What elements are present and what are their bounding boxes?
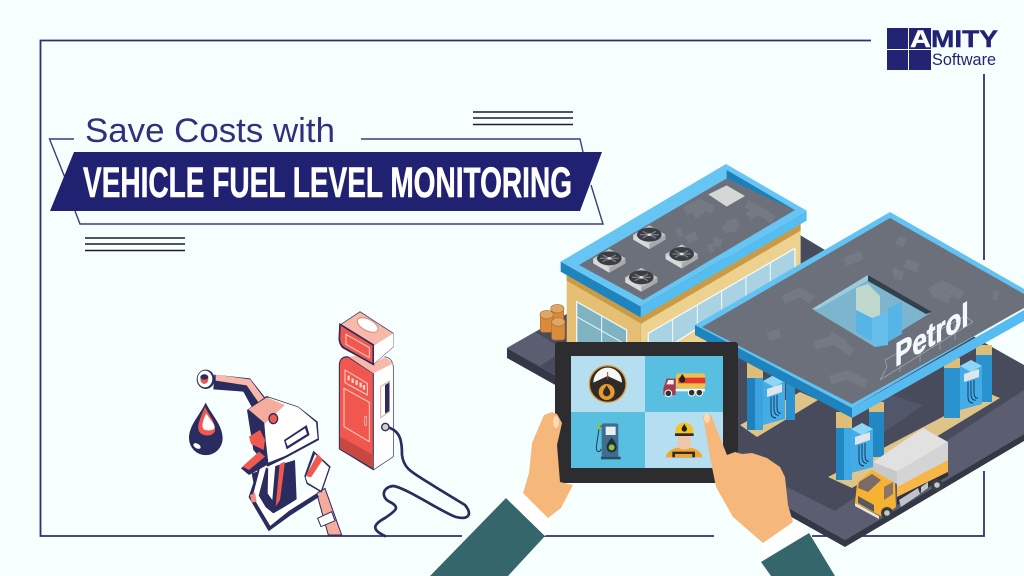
pillar bases <box>740 392 818 437</box>
dispenser body <box>339 356 393 470</box>
fuel dispenser <box>339 312 393 470</box>
left windows <box>577 302 627 373</box>
coins stack <box>540 304 565 340</box>
nozzle guard <box>304 451 331 493</box>
roof inset <box>579 178 795 300</box>
right hand and sleeve <box>703 413 835 576</box>
fuel canopy <box>695 212 1024 488</box>
icon: fuel gauge <box>589 366 626 402</box>
nozzle hose <box>317 488 342 535</box>
dispenser head <box>339 312 393 364</box>
tablet <box>555 342 738 483</box>
triple lines top <box>473 112 573 124</box>
right windows <box>648 248 795 360</box>
roof rim <box>561 262 641 317</box>
frame border <box>40 40 984 536</box>
nozzle spout <box>213 375 268 412</box>
banner ribbon <box>50 152 602 211</box>
nozzle lever <box>241 452 267 475</box>
nozzle body <box>247 396 319 467</box>
heading: vehicle fuel level monitoring: VEHICLE FUEL LEVEL MONITORING <box>83 159 572 207</box>
left sleeve <box>430 498 545 576</box>
right wall <box>641 223 801 373</box>
left hand and sleeve <box>430 412 573 576</box>
right sleeve <box>761 533 835 576</box>
tablet screen <box>571 356 645 412</box>
logo: Amity Software: A <box>910 26 931 53</box>
right cuff <box>761 522 809 560</box>
logo: Amity Software <box>887 26 998 70</box>
heading: save costs with: Save Costs with <box>85 112 335 150</box>
left cuff <box>506 493 552 536</box>
right hand <box>703 413 793 543</box>
roof patches <box>677 203 773 249</box>
fuel nozzle <box>197 370 342 535</box>
left hand <box>523 412 573 518</box>
title block <box>50 112 603 224</box>
logo: Amity Software: MITY <box>931 26 998 53</box>
triple lines bottom <box>85 238 185 250</box>
dispenser hose <box>375 428 469 536</box>
delivery truck <box>855 428 948 519</box>
icon: fuel pump <box>596 423 621 459</box>
skylight <box>812 275 932 347</box>
icon: worker <box>666 423 702 457</box>
roof fans <box>593 225 698 292</box>
nozzle handle <box>252 460 297 513</box>
left wall <box>567 273 641 373</box>
logo: Amity Software: Software <box>932 51 996 69</box>
banner outline <box>50 139 603 224</box>
pillars and pumps <box>740 345 1000 488</box>
canopy patches <box>768 240 998 384</box>
right pillars <box>944 358 960 418</box>
icon: tanker truck <box>663 373 705 397</box>
back pillar left <box>747 362 755 430</box>
petrol station ground platform <box>507 235 1024 547</box>
store building <box>540 164 807 373</box>
roof hatch <box>708 185 745 207</box>
fuel drop icon <box>189 403 223 455</box>
canopy roof <box>702 218 1024 404</box>
canopy rim <box>695 325 852 418</box>
sign: petrol: Petrol <box>895 294 969 374</box>
front pillars <box>869 402 884 457</box>
